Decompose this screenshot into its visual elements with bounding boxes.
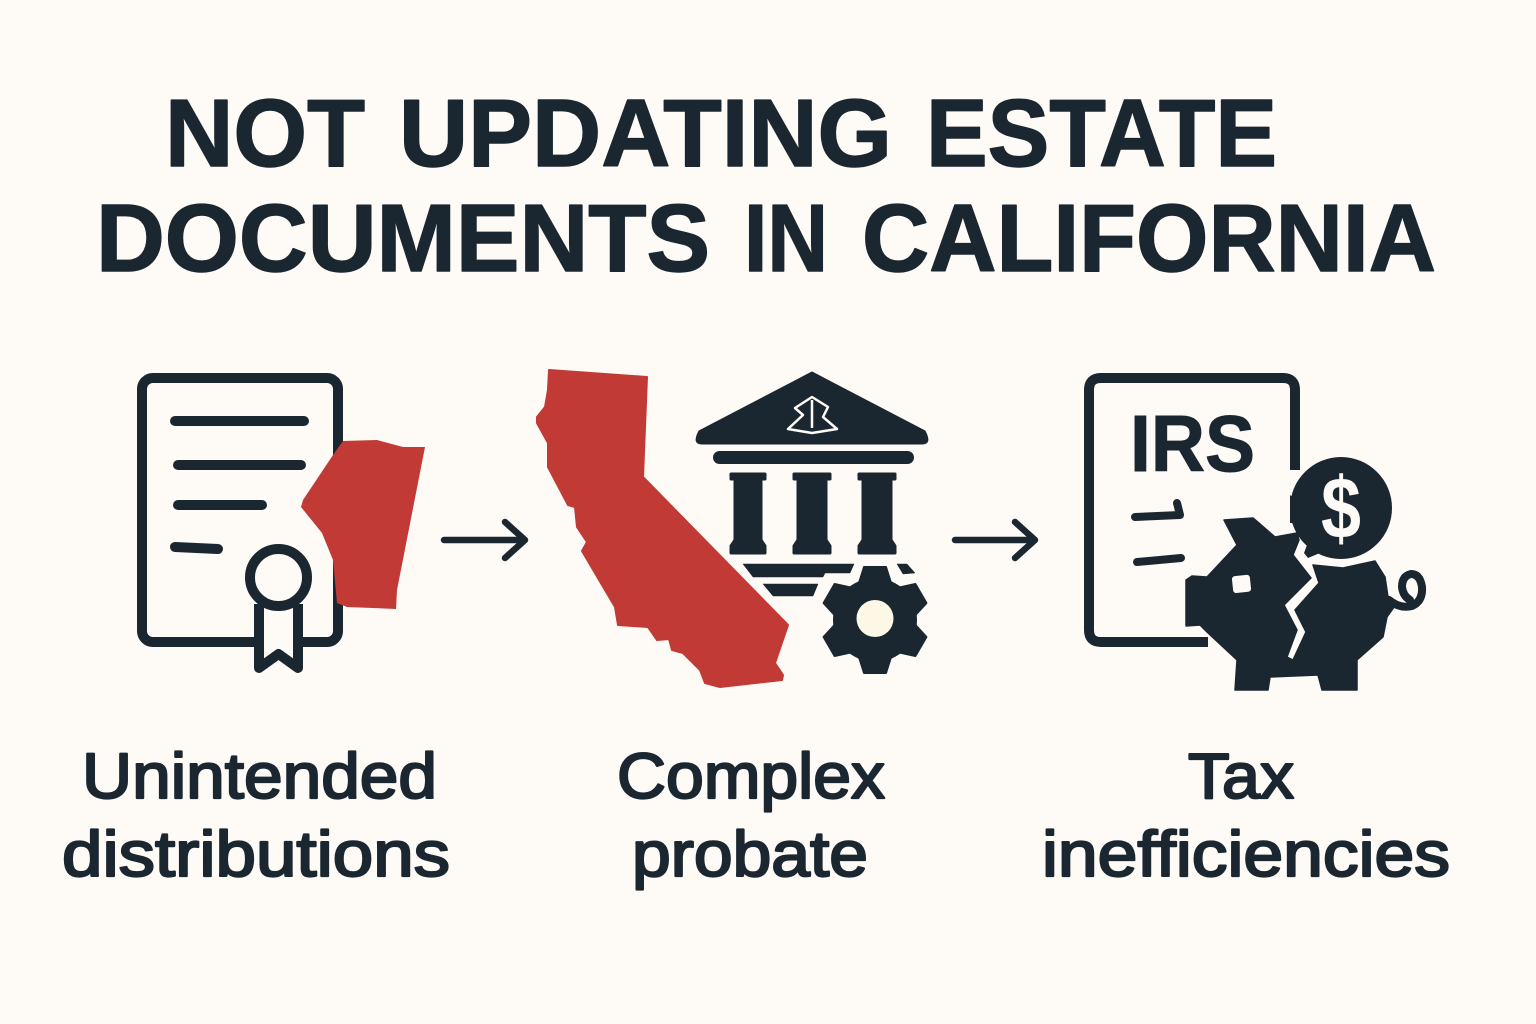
title bbox=[96, 80, 1436, 292]
label: unintended distributions: Unintended bbox=[82, 740, 437, 812]
icon: will document with ribbon seal and red patch bbox=[142, 378, 425, 668]
label: tax inefficiencies: Tax bbox=[1188, 740, 1294, 812]
arrow 1 bbox=[444, 522, 525, 558]
icon: courthouse bbox=[696, 372, 928, 596]
label: complex probate: probate bbox=[632, 818, 868, 890]
title: DOCUMENTS bbox=[96, 185, 710, 292]
title: NOT bbox=[165, 80, 365, 187]
title: IN bbox=[744, 185, 828, 292]
label: unintended distributions: distributions bbox=[62, 818, 450, 890]
title: CALIFORNIA bbox=[862, 185, 1436, 292]
title: ESTATE bbox=[926, 80, 1277, 187]
label: tax inefficiencies: inefficiencies bbox=[1042, 818, 1450, 890]
arrow 2 bbox=[955, 522, 1035, 558]
icon: California map bbox=[537, 370, 788, 687]
label: unintended distributions bbox=[62, 740, 450, 890]
label: complex probate bbox=[617, 740, 885, 890]
icon: gear bbox=[821, 567, 929, 673]
label: complex probate: Complex bbox=[617, 740, 885, 812]
icon: IRS document bbox=[1089, 378, 1295, 642]
icon: broken piggy bank with coin: $ bbox=[1321, 460, 1361, 557]
icon: broken piggy bank with coin bbox=[1186, 457, 1422, 690]
icon: IRS document: IRS bbox=[1130, 399, 1255, 488]
label: tax inefficiencies bbox=[1042, 740, 1450, 890]
title: UPDATING bbox=[399, 80, 892, 187]
